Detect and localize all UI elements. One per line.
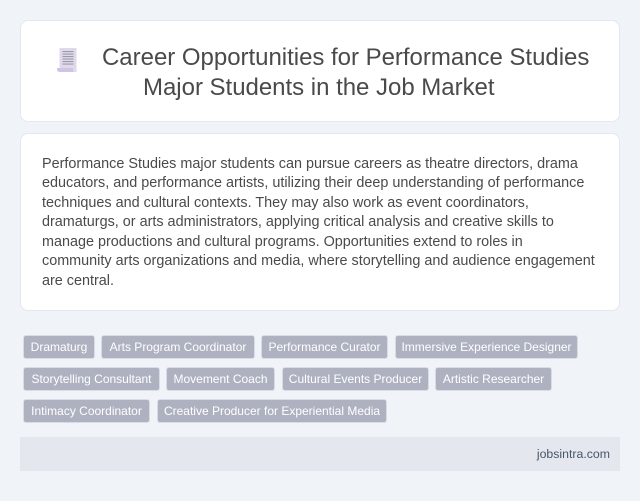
tag: Arts Program Coordinator — [110, 340, 246, 354]
tag: Creative Producer for Experiential Media — [164, 404, 380, 418]
title line 1: Career Opportunities for Performance Studies — [102, 44, 589, 71]
icon: document scroll — [57, 48, 76, 72]
tag: Artistic Researcher — [443, 372, 544, 386]
tag — [282, 367, 429, 391]
tag — [435, 367, 552, 391]
tag — [23, 399, 150, 423]
footer bar — [20, 437, 620, 471]
tag — [23, 367, 160, 391]
tag — [157, 399, 387, 423]
footer source text: jobsintra.com — [537, 447, 610, 461]
description text: Performance Studies major students can pursue careers as theatre directors, drama — [42, 156, 578, 172]
tag — [261, 335, 388, 359]
tag: Immersive Experience Designer — [401, 340, 572, 354]
tag: Movement Coach — [173, 372, 268, 386]
tag — [395, 335, 578, 359]
description text: manage productions and cultural programs. Opportunities extend to roles in — [42, 234, 523, 250]
tag — [101, 335, 255, 359]
description text: community arts organizations and media, where storytelling and audience engagement — [42, 253, 595, 269]
description text: are central. — [42, 273, 114, 289]
tag — [23, 335, 95, 359]
tag: Intimacy Coordinator — [31, 404, 142, 418]
tag list — [23, 335, 578, 423]
description text: techniques and cultural contexts. They may also work as event coordinators, — [42, 195, 529, 211]
description text — [42, 156, 595, 289]
tag: Dramaturg — [31, 340, 87, 354]
tag — [166, 367, 275, 391]
panel: description — [20, 133, 620, 311]
description text: dramaturgs, or arts administrators, applying critical analysis and creative skills to — [42, 214, 554, 230]
panel: title card — [20, 20, 620, 122]
tag: Storytelling Consultant — [31, 372, 152, 386]
title line 2: Major Students in the Job Market — [143, 74, 495, 101]
tag: Performance Curator — [268, 340, 381, 354]
tag: Cultural Events Producer — [289, 372, 422, 386]
description text: educators, and performance artists, utilizing their deep understanding of performance — [42, 175, 584, 191]
